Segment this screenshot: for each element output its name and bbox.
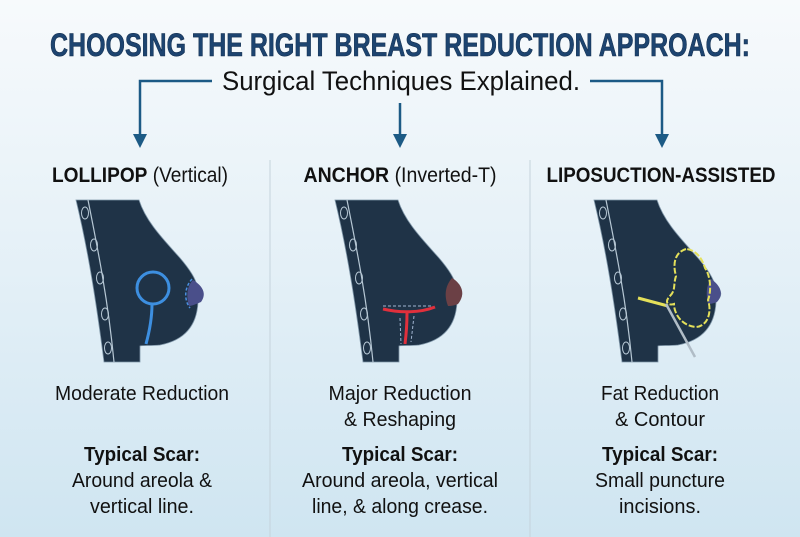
panel: anchor: line, & along crease.	[312, 496, 488, 518]
panel: liposuction: & Contour	[615, 409, 705, 431]
panel: lollipop	[52, 164, 229, 518]
panel: liposuction: incisions.	[619, 496, 701, 518]
subtitle: Surgical Techniques Explained.	[222, 66, 580, 96]
panel: liposuction: Small puncture	[595, 470, 725, 492]
illustration: anchor	[335, 200, 462, 362]
panel: lollipop: vertical line.	[90, 496, 194, 518]
panel: anchor	[302, 164, 498, 518]
panel: lollipop: Around areola &	[72, 470, 213, 492]
illustration: liposuction	[594, 200, 721, 362]
scar text: Typical Scar:	[342, 444, 458, 466]
heading: lollipop: LOLLIPOP (Vertical)	[52, 164, 228, 187]
scar text: Typical Scar:	[84, 444, 200, 466]
panel: liposuction	[546, 164, 776, 518]
description: Fat Reduction	[601, 383, 719, 405]
heading: liposuction: LIPOSUCTION-ASSISTED	[546, 164, 776, 187]
arrow: left	[133, 81, 212, 148]
panel: anchor: & Reshaping	[344, 409, 456, 431]
description: Moderate Reduction	[55, 383, 229, 405]
scar text: Typical Scar:	[602, 444, 718, 466]
arrow: right	[590, 81, 669, 148]
panel: anchor: Around areola, vertical	[302, 470, 498, 492]
arrow: center	[393, 103, 407, 148]
illustration: lollipop	[76, 200, 204, 362]
description: Major Reduction	[328, 383, 472, 405]
heading: anchor: ANCHOR (Inverted-T)	[304, 164, 496, 187]
